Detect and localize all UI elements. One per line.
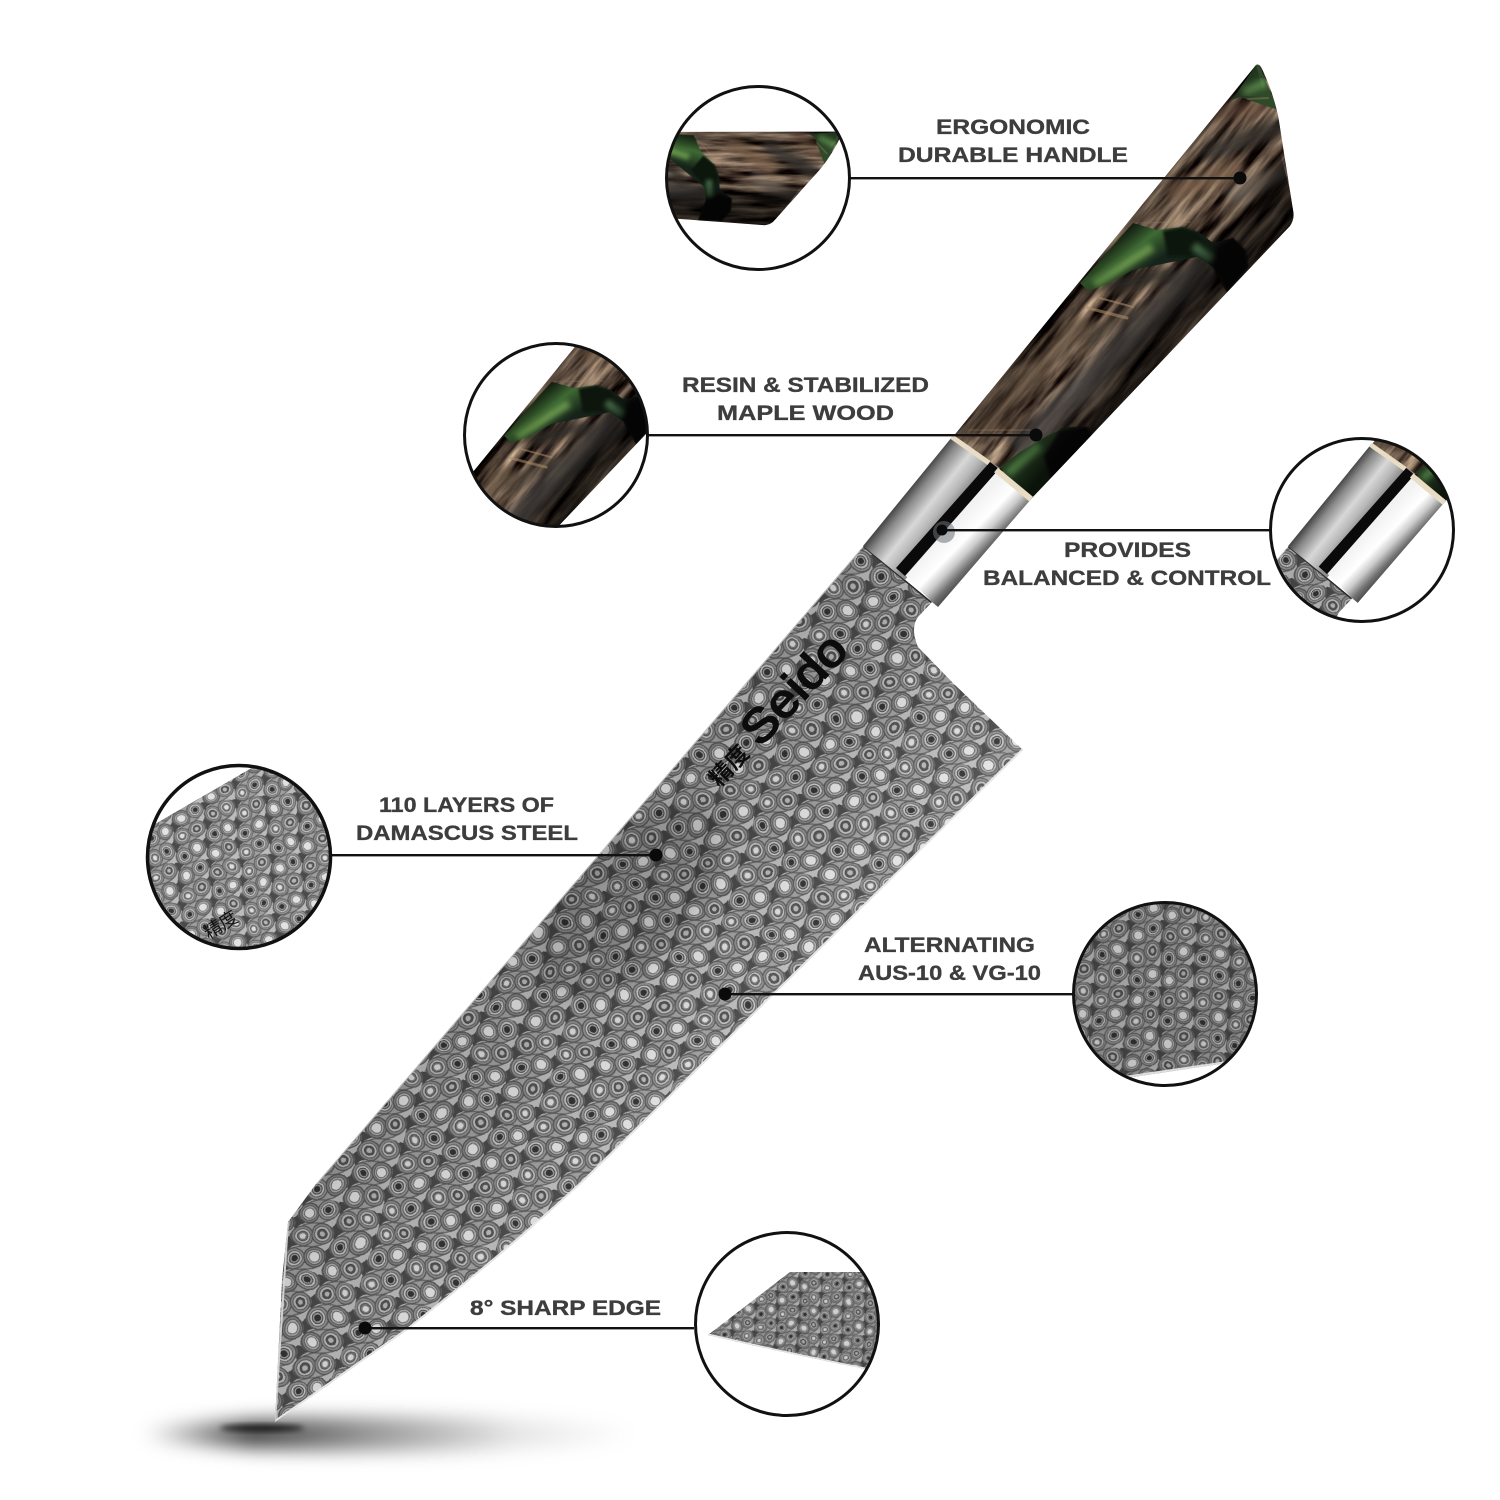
- label: ERGONOMIC: [936, 115, 1090, 139]
- callout: alternating AUS-10 and VG-10: [718, 802, 1358, 1187]
- leader line and dot: [358, 1322, 694, 1334]
- handle: [936, 56, 1361, 532]
- callout: 110 layers of damascus steel: [58, 676, 662, 1042]
- label: 110 LAYERS OF: [379, 793, 554, 817]
- callout: provides balanced and control: [652, 437, 1455, 862]
- kiritsuke knife: [240, 56, 1361, 1440]
- detail circle: bolster: [709, 91, 1500, 1378]
- leader line and dot: [933, 521, 1270, 543]
- label: MAPLE WOOD: [717, 401, 894, 425]
- detail circle: handle end: [514, 85, 851, 465]
- detail circle: steel layers: [973, 802, 1358, 1187]
- leader line and dot: [850, 172, 1246, 184]
- green resin: lower band: [1000, 427, 1094, 503]
- callout: 8 degree sharp edge: [358, 1173, 939, 1475]
- label: [858, 933, 1041, 985]
- detail circle: resin and wood: [374, 232, 757, 660]
- ground shadow: [140, 1417, 640, 1451]
- leader line and dot: [648, 428, 1042, 442]
- green resin: middle band: [1080, 223, 1248, 292]
- label: DURABLE HANDLE: [898, 143, 1128, 167]
- callout: resin and stabilized maple wood: [463, 85, 1042, 528]
- detail circle: blade tip: [694, 1231, 880, 1417]
- label: DAMASCUS STEEL: [356, 821, 578, 845]
- leader line and dot: [718, 988, 1073, 1000]
- green resin: butt tip: [1232, 62, 1278, 110]
- callout: ergonomic durable handle: [428, 0, 1246, 407]
- detail circle: damascus pattern: 精度: [200, 907, 241, 943]
- wood and resin body: [936, 56, 1361, 532]
- label: [898, 115, 1128, 167]
- label: 8° SHARP EDGE: [470, 1296, 661, 1320]
- detail circle: damascus pattern: [58, 676, 423, 1042]
- blade logo: Seido: Seido: [729, 623, 857, 755]
- leader line and dot: [332, 848, 662, 862]
- label: AUS-10 & VG-10: [858, 961, 1041, 985]
- label: [356, 793, 578, 845]
- grain bands: [985, 105, 1290, 445]
- blade logo: Seido: 精度: [704, 740, 754, 791]
- label: [983, 538, 1271, 590]
- blade logo: Seido: [704, 623, 857, 791]
- label: PROVIDES: [1064, 538, 1191, 562]
- label: RESIN & STABILIZED: [682, 373, 929, 397]
- label: BALANCED & CONTROL: [983, 566, 1271, 590]
- blade with damascus pattern: [240, 520, 1060, 1440]
- label: ALTERNATING: [864, 933, 1035, 957]
- tan wood highlights: [968, 98, 1268, 430]
- steel bolster: [863, 437, 1032, 607]
- label: [682, 373, 929, 425]
